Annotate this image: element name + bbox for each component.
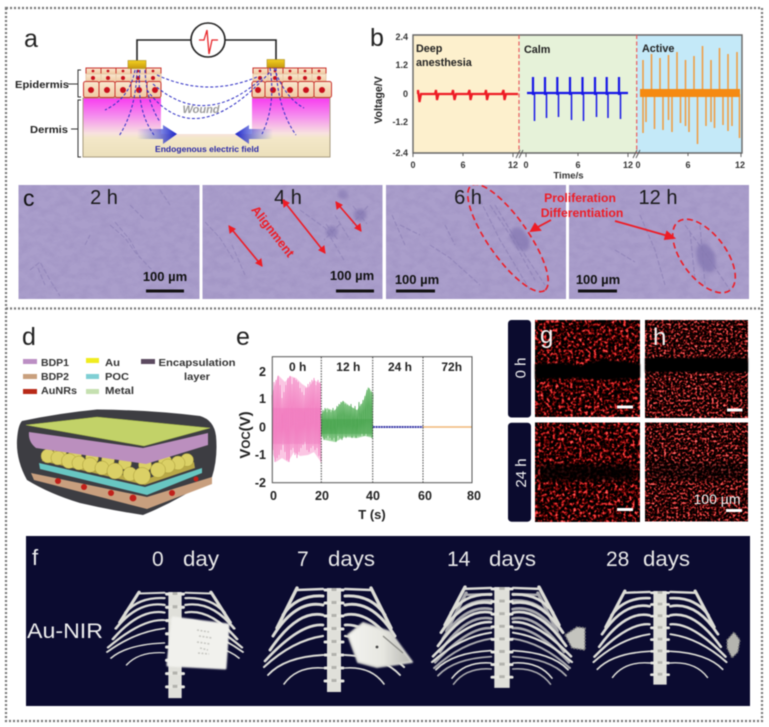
day labels bbox=[152, 548, 690, 571]
region backgrounds bbox=[413, 35, 742, 153]
micrograph 2 h bbox=[18, 185, 200, 299]
panel letter f: f bbox=[32, 545, 39, 570]
implant fragment day 14 bbox=[565, 627, 585, 650]
panel e: Voc chart bbox=[236, 323, 481, 522]
region labels: Calm bbox=[524, 44, 550, 56]
day labels: day bbox=[183, 548, 220, 571]
micrograph 6 h bbox=[386, 174, 566, 302]
y axis title: VOC(V) bbox=[237, 411, 254, 459]
implant day 0 bbox=[168, 618, 228, 668]
x axis ticks: 0 bbox=[523, 160, 529, 170]
y ticks: 0 bbox=[259, 420, 266, 434]
legend: POC bbox=[105, 372, 129, 383]
wound label: Wound bbox=[182, 104, 220, 116]
ribcage day 7 bbox=[264, 588, 404, 692]
dark background bbox=[26, 536, 750, 706]
time tab 0 h bbox=[508, 320, 531, 418]
day labels: days bbox=[328, 548, 375, 571]
y axis ticks: -2.4 bbox=[392, 148, 408, 158]
scale bar bbox=[727, 408, 742, 412]
scale bar bbox=[617, 508, 633, 511]
region labels: Deep bbox=[416, 43, 443, 55]
x ticks: 0 bbox=[270, 489, 277, 503]
panel letter b: b bbox=[370, 24, 384, 52]
day labels: days bbox=[643, 548, 690, 571]
time period labels: 72h bbox=[441, 360, 462, 374]
x ticks: 80 bbox=[467, 489, 481, 503]
time period labels: 24 h bbox=[388, 360, 412, 374]
epidermis label: Epidermis bbox=[15, 80, 69, 91]
implant day 7 bbox=[348, 623, 412, 667]
time period labels: 12 h bbox=[336, 360, 360, 374]
day labels: 0 bbox=[152, 548, 164, 571]
scale bar bbox=[726, 509, 742, 512]
icon: voltage meter bbox=[191, 23, 225, 57]
region labels: anesthesia bbox=[416, 57, 473, 69]
scale bar bbox=[578, 290, 617, 292]
BDP1 layer bbox=[29, 432, 208, 464]
x axis ticks bbox=[410, 160, 745, 170]
axis break marks bbox=[413, 150, 741, 158]
scale bar bbox=[396, 290, 435, 292]
x ticks: 60 bbox=[418, 489, 432, 503]
callout arrow to 12 h bbox=[615, 221, 674, 239]
plot frame bbox=[272, 357, 472, 483]
time tab 24 h bbox=[508, 423, 531, 522]
x ticks bbox=[270, 489, 481, 503]
day labels: 28 bbox=[606, 548, 629, 571]
AuNR dots bbox=[55, 476, 198, 501]
scale bar bbox=[617, 406, 633, 408]
legend: AuNRs bbox=[41, 386, 77, 397]
y axis ticks bbox=[392, 32, 408, 158]
legend: Encapsulation bbox=[158, 358, 236, 369]
x axis ticks: 12 bbox=[735, 160, 745, 170]
day labels: 7 bbox=[297, 548, 309, 571]
panel letter e: e bbox=[236, 323, 250, 351]
legend: Au bbox=[105, 358, 120, 369]
wound cavity bbox=[161, 66, 252, 134]
dermis label: Dermis bbox=[30, 125, 68, 136]
ribcage day 28 bbox=[594, 591, 726, 685]
x axis ticks: 0 bbox=[635, 160, 641, 170]
x axis ticks: 0 bbox=[410, 160, 416, 170]
encapsulation shell bbox=[17, 410, 216, 515]
legend: Metal bbox=[105, 386, 134, 397]
electric field lines bbox=[105, 68, 304, 136]
time label 12 h: 12 h bbox=[639, 187, 677, 209]
scale label: 100 µm bbox=[330, 268, 374, 283]
scale label: 100 µm bbox=[143, 269, 187, 284]
metal top layer bbox=[26, 417, 210, 446]
panel b: voltage chart bbox=[370, 24, 745, 182]
day labels: days bbox=[489, 548, 536, 571]
y ticks: -2 bbox=[255, 476, 266, 490]
y axis title: Voltage/V bbox=[373, 76, 385, 124]
micrograph g 24 h bbox=[535, 423, 640, 522]
panel letter h: h bbox=[653, 324, 666, 351]
region dividers bbox=[519, 35, 637, 153]
proliferation differentiation label bbox=[541, 191, 623, 220]
x axis ticks: 12 bbox=[623, 160, 633, 170]
legend: BDP2 bbox=[41, 372, 69, 383]
callout arrow to 6 h bbox=[531, 220, 551, 231]
scale bar bbox=[336, 290, 374, 292]
micrograph h 24 h bbox=[645, 423, 748, 521]
scale label: 100 µm bbox=[576, 272, 620, 287]
y ticks: 1 bbox=[259, 392, 266, 406]
panel letter d: d bbox=[22, 323, 36, 351]
device illustration bbox=[17, 410, 216, 515]
panel letter c: c bbox=[23, 185, 34, 211]
time label 4 h: 4 h bbox=[274, 187, 302, 209]
pink 0 h trace bbox=[272, 375, 321, 462]
scale bar bbox=[146, 290, 184, 292]
cell nuclei bbox=[88, 70, 325, 93]
x ticks: 40 bbox=[366, 489, 380, 503]
y axis ticks: 2.4 bbox=[395, 32, 408, 42]
ribcage day 14 bbox=[432, 587, 572, 688]
day labels: 14 bbox=[447, 548, 471, 571]
time tab 0 h: 0 h bbox=[512, 358, 530, 378]
epidermis cells left bbox=[84, 68, 161, 98]
x axis ticks: 6 bbox=[460, 160, 466, 170]
legend: BDP1 bbox=[41, 358, 69, 369]
epidermis cells right bbox=[252, 68, 332, 98]
micrograph g 0 h bbox=[535, 320, 640, 417]
alignment arrows bbox=[229, 200, 361, 266]
row label: Au-NIR bbox=[27, 620, 103, 643]
proliferation differentiation label: Proliferation bbox=[544, 191, 616, 205]
legend: layer bbox=[184, 372, 210, 383]
panel f: in vivo imaging bbox=[26, 536, 750, 706]
plot frame bbox=[413, 35, 742, 153]
green 12 h trace bbox=[321, 387, 373, 442]
panel letter g: g bbox=[540, 322, 553, 349]
blue arrow left bbox=[235, 125, 273, 144]
region labels: Active bbox=[642, 43, 674, 55]
micrograph 4 h bbox=[202, 185, 382, 299]
blue arrow right bbox=[137, 125, 177, 144]
orange 72 h trace bbox=[423, 426, 472, 428]
brackets bbox=[68, 70, 81, 157]
time label 2 h: 2 h bbox=[90, 187, 118, 209]
blue 24 h trace bbox=[373, 426, 423, 428]
Au spheres bbox=[41, 446, 194, 484]
trace: active bbox=[640, 46, 740, 144]
time label 6 h: 6 h bbox=[454, 187, 482, 209]
dotted dividers bbox=[321, 357, 423, 483]
trace: deep anesthesia bbox=[418, 90, 518, 102]
implant fragment day 28 bbox=[727, 632, 740, 658]
ribcage day 0 bbox=[107, 592, 243, 698]
micrograph h 0 h bbox=[645, 320, 748, 418]
x ticks: 20 bbox=[315, 489, 329, 503]
panel a: wound schematic bbox=[15, 23, 332, 157]
panel c: microscopy strip bbox=[18, 184, 750, 300]
time tab 24 h: 24 h bbox=[513, 458, 530, 488]
region labels bbox=[416, 43, 674, 69]
x axis title: T (s) bbox=[358, 507, 386, 522]
alignment label: Alignment bbox=[248, 203, 297, 261]
circuit wire bbox=[137, 40, 276, 62]
x axis ticks: 6 bbox=[575, 160, 581, 170]
scale label: 100 µm bbox=[694, 491, 740, 507]
micrograph 12 h bbox=[569, 185, 749, 304]
x axis title: Time/s bbox=[553, 170, 584, 182]
gold electrodes bbox=[128, 60, 284, 68]
BDP2 layer bbox=[31, 473, 212, 509]
proliferation differentiation label: Differentiation bbox=[541, 206, 623, 220]
y ticks: 2 bbox=[259, 365, 266, 379]
POC layer bbox=[39, 463, 202, 495]
y axis ticks: 0 bbox=[403, 89, 408, 99]
x axis ticks: 12 bbox=[508, 160, 518, 170]
panels g and h: fluorescence bbox=[508, 320, 748, 522]
y ticks bbox=[255, 365, 266, 490]
y axis ticks: -1.2 bbox=[392, 117, 408, 127]
endogenous electric field label: Endogenous electric field bbox=[155, 144, 259, 154]
panel d: device structure bbox=[17, 323, 235, 515]
panel letter a: a bbox=[24, 25, 38, 53]
trace: calm bbox=[527, 77, 628, 121]
time period labels bbox=[289, 360, 462, 374]
dashed ellipse 6 h bbox=[466, 184, 550, 294]
y ticks: -1 bbox=[255, 448, 266, 462]
y axis ticks: 1.2 bbox=[395, 60, 408, 70]
scale label: 100 µm bbox=[395, 272, 439, 287]
legend bbox=[23, 358, 236, 397]
dashed ellipse 12 h bbox=[671, 218, 737, 294]
skin dermis block bbox=[83, 98, 330, 157]
x axis ticks: 6 bbox=[685, 160, 691, 170]
time period labels: 0 h bbox=[289, 360, 306, 374]
Au base layer bbox=[42, 456, 195, 485]
